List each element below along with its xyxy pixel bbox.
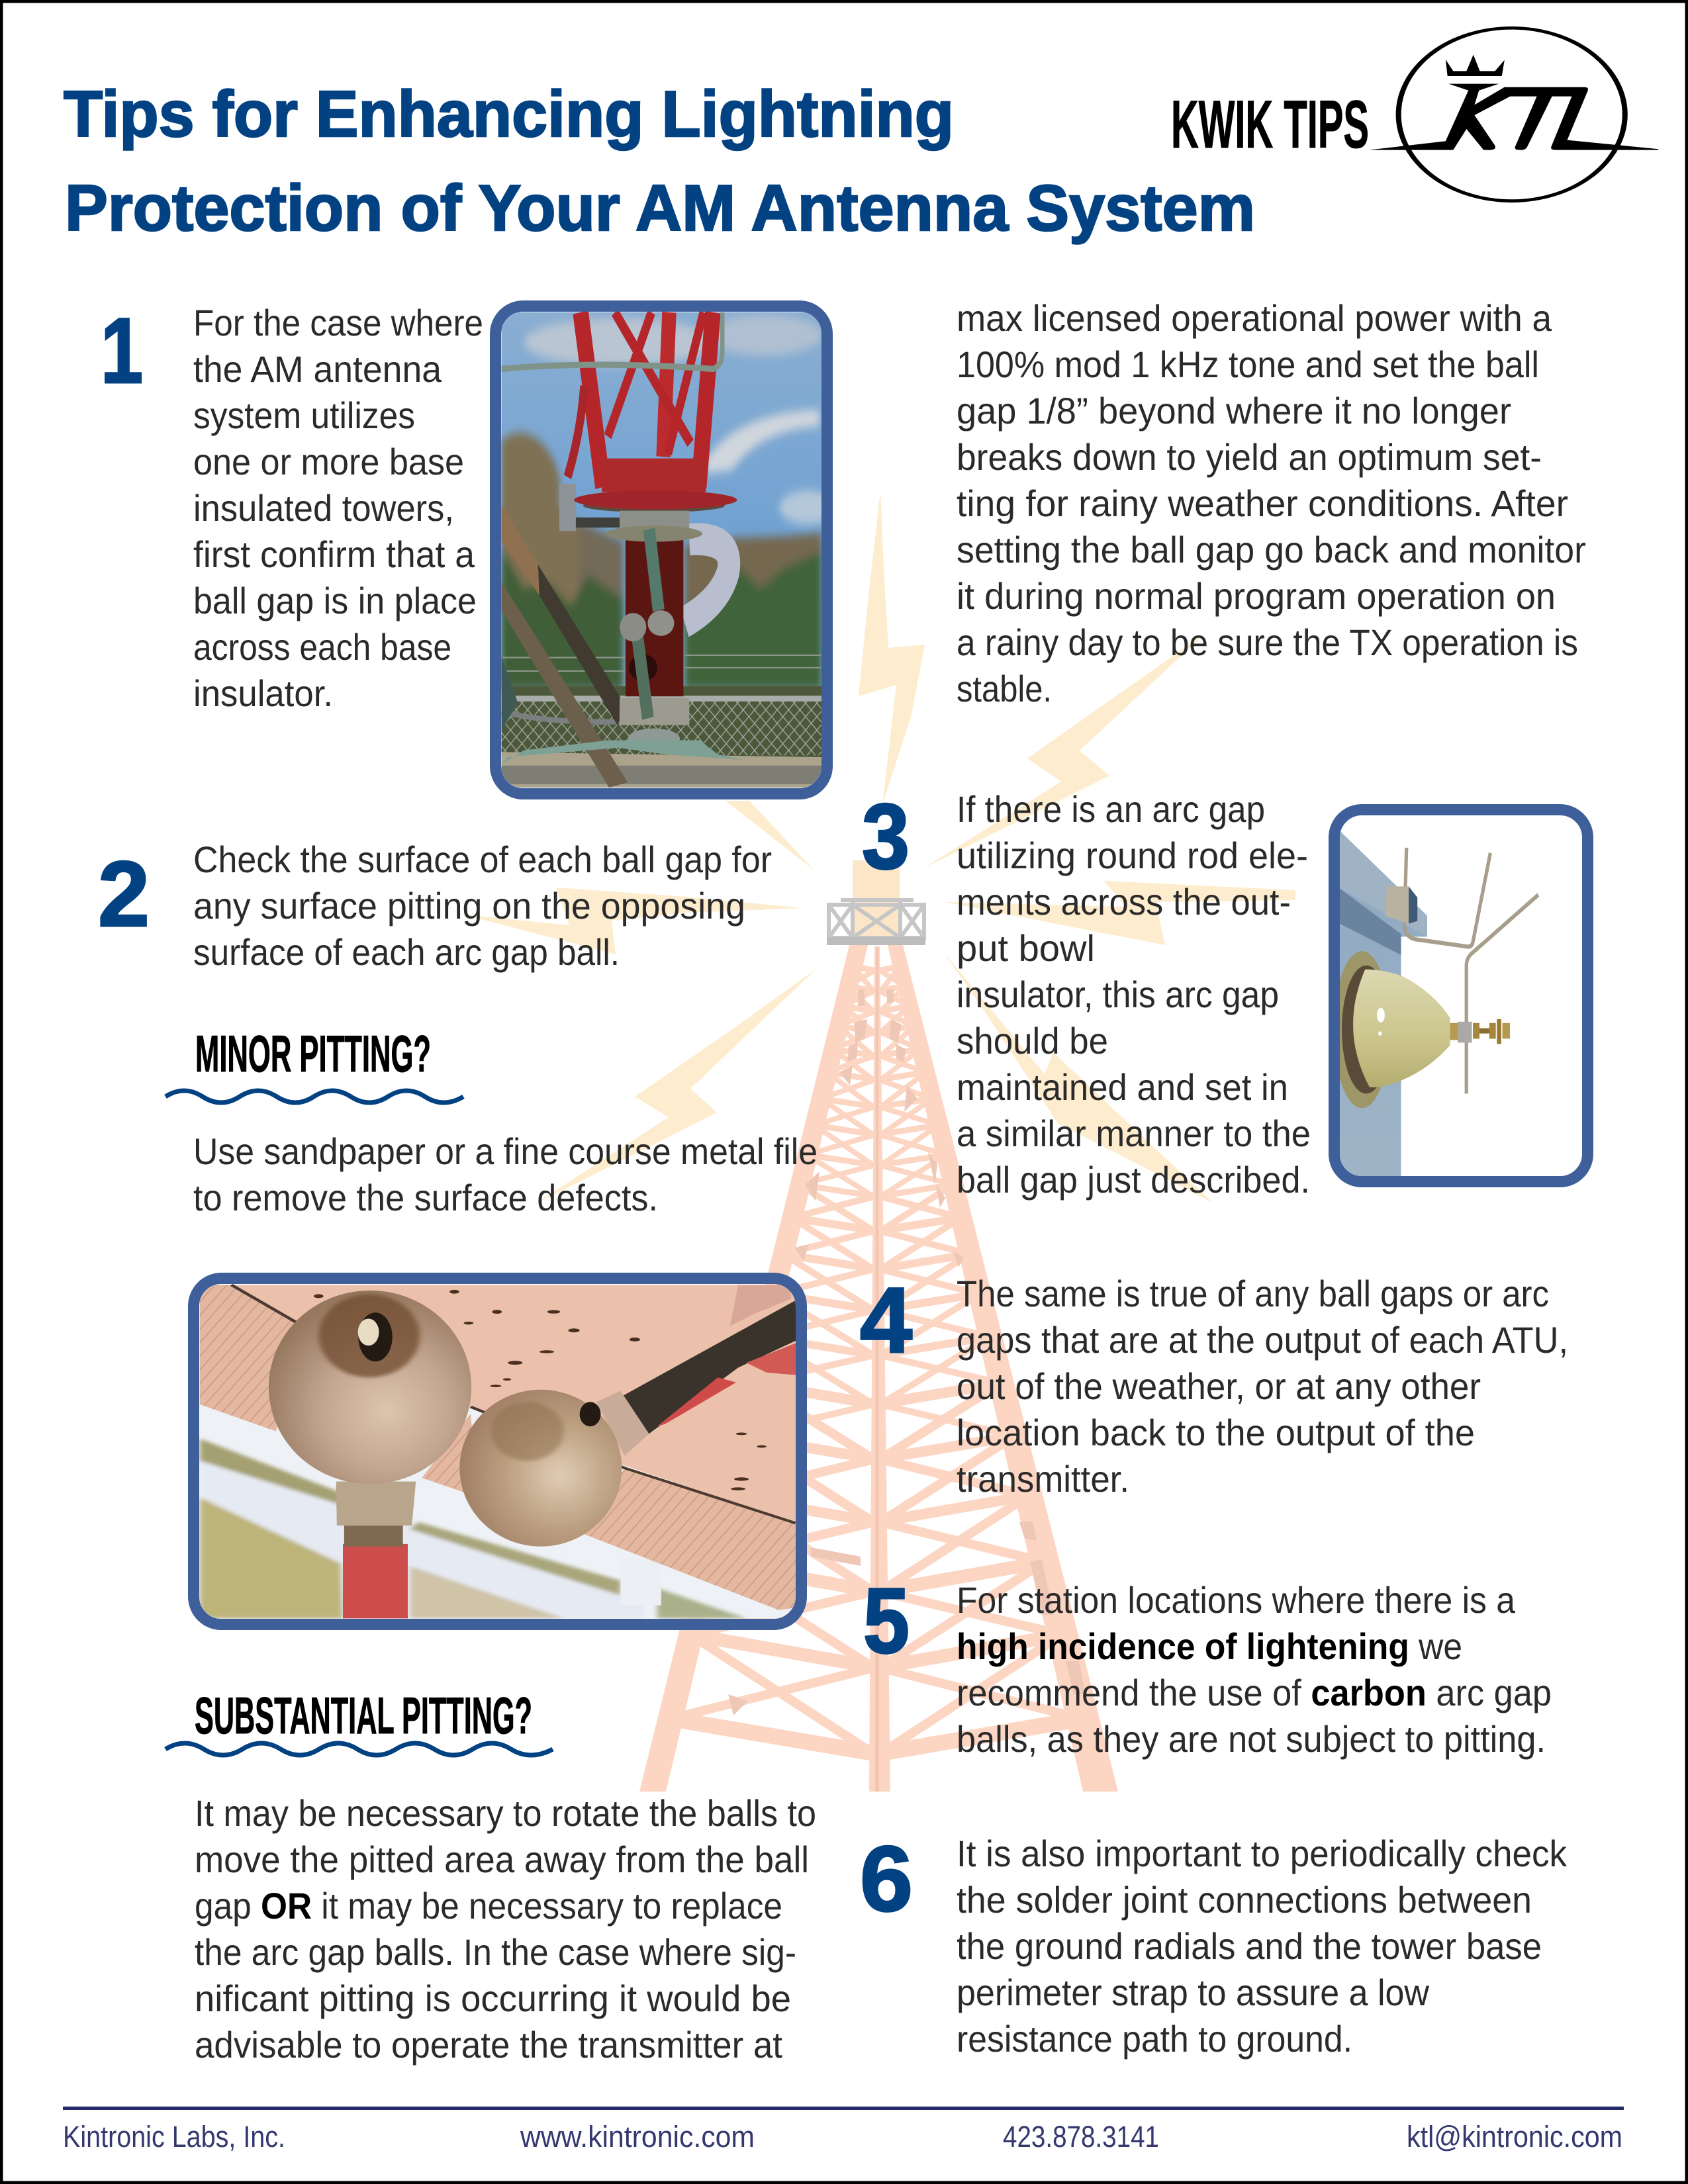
number 6: 6	[860, 1827, 913, 1931]
step 1 text: insulated towers,	[193, 487, 454, 529]
footer contact details: www.kintronic.com	[520, 2120, 755, 2154]
step 4 text: out of the weather, or at any other	[957, 1365, 1481, 1407]
step 6 text: the ground radials and the tower base	[957, 1925, 1542, 1967]
substantial pitting text: It may be necessary to rotate the balls to	[195, 1792, 816, 1834]
step 6 text	[957, 1833, 1568, 2060]
step 3 text: insulator, this arc gap	[957, 974, 1279, 1015]
continued step text, right column: breaks down to yield an optimum set-	[957, 436, 1542, 478]
number 2: 2	[98, 842, 150, 946]
wavy underline: minor pitting	[165, 1091, 463, 1103]
number 5: 5	[863, 1569, 910, 1672]
footer contact details: ktl@kintronic.com	[1407, 2120, 1622, 2154]
step 4 text: location back to the output of the	[957, 1412, 1475, 1453]
tower lattice	[671, 966, 1082, 1754]
step 4 text	[957, 1273, 1568, 1500]
continued step text, right column: gap 1/8” beyond where it no longer	[957, 390, 1511, 432]
step 6 text: It is also important to periodically check	[957, 1833, 1568, 1874]
step 6 text: resistance path to ground.	[957, 2018, 1352, 2060]
title	[64, 77, 1255, 244]
substantial pitting text: advisable to operate the transmitter at	[195, 2024, 782, 2066]
title: Tips for Enhancing Lightning	[64, 77, 954, 150]
title: Protection of Your AM Antenna System	[65, 171, 1255, 244]
step 1 text: ball gap is in place	[193, 580, 477, 621]
wavy underline: substantial pitting	[165, 1743, 553, 1755]
step 5 text: recommend the use of carbon arc gap	[957, 1672, 1552, 1713]
footer contact details	[63, 2120, 1622, 2154]
footer contact details: 423.878.3141	[1003, 2120, 1159, 2154]
continued step text, right column: a rainy day to be sure the TX operation is	[957, 621, 1578, 663]
step 3 text: If there is an arc gap	[957, 788, 1265, 830]
continued step text, right column: setting the ball gap go back and monitor	[957, 529, 1586, 570]
heading: substantial pitting: SUBSTANTIAL PITTING?	[195, 1686, 532, 1745]
step 5 text: balls, as they are not subject to pitting.	[957, 1718, 1546, 1760]
number 3: 3	[862, 784, 910, 888]
step 1 text: first confirm that a	[193, 533, 475, 575]
heading: minor pitting: MINOR PITTING?	[195, 1024, 431, 1083]
step 5 text	[957, 1579, 1552, 1760]
continued step text, right column: stable.	[957, 668, 1052, 709]
continued step text, right column: 100% mod 1 kHz tone and set the ball	[957, 343, 1539, 385]
step 3 text: put bowl	[957, 927, 1095, 969]
footer rule	[63, 2107, 1624, 2110]
continued step text, right column: max licensed operational power with a	[957, 297, 1552, 339]
step 1 text: across each base	[193, 626, 451, 668]
step 3 text: utilizing round rod ele-	[957, 835, 1308, 876]
step 4 text: transmitter.	[957, 1458, 1129, 1500]
step 2 text: surface of each arc gap ball.	[193, 931, 620, 973]
photo frame	[193, 1279, 801, 1624]
step 2 text	[193, 839, 772, 973]
step 3 text: ball gap just described.	[957, 1159, 1310, 1201]
continued step text, right column	[957, 297, 1586, 709]
photo frame	[495, 306, 827, 794]
KWIK TIPS label: KWIK TIPS	[1171, 87, 1369, 162]
tower platform	[827, 900, 925, 941]
step 1 text: one or more base	[193, 441, 464, 482]
step 2 text: Check the surface of each ball gap for	[193, 839, 772, 880]
number 1: 1	[101, 298, 143, 402]
continued step text, right column: it during normal program operation on	[957, 575, 1556, 617]
substantial pitting text: move the pitted area away from the ball	[195, 1839, 809, 1880]
minor pitting text: Use sandpaper or a fine course metal file	[193, 1130, 818, 1172]
step 3 text: ments across the out-	[957, 881, 1291, 923]
substantial pitting text: gap OR it may be necessary to replace	[195, 1885, 782, 1927]
step 5 text: high incidence of lightening we	[957, 1625, 1462, 1667]
icon: KTL logo	[1369, 28, 1658, 201]
minor pitting text: to remove the surface defects.	[193, 1177, 658, 1218]
step 6 text: the solder joint connections between	[957, 1879, 1532, 1921]
step 4 text: gaps that are at the output of each ATU,	[957, 1319, 1568, 1361]
antenna top glow	[853, 860, 900, 942]
substantial pitting text: nificant pitting is occurring it would be	[195, 1978, 791, 2019]
substantial pitting text: the arc gap balls. In the case where sig-	[195, 1931, 796, 1973]
lightning bolts background	[463, 492, 1295, 1205]
step 3 text: a similar manner to the	[957, 1113, 1311, 1154]
photo: pitted arc gap balls	[193, 1279, 801, 1624]
step 5 text: For station locations where there is a	[957, 1579, 1516, 1621]
tower legs	[639, 942, 1118, 1792]
minor pitting text	[193, 1130, 818, 1218]
number 4: 4	[860, 1268, 912, 1372]
step 1 text	[193, 302, 483, 714]
step 3 text	[957, 788, 1311, 1201]
step 2 text: any surface pitting on the opposing	[193, 885, 745, 927]
step 6 text: perimeter strap to assure a low	[957, 1972, 1430, 2013]
step 1 text: insulator.	[193, 672, 333, 714]
continued step text, right column: ting for rainy weather conditions. After	[957, 482, 1568, 524]
photo: arc gap on output bowl insulator	[1334, 810, 1587, 1182]
tower illustration	[639, 860, 1118, 1792]
step 3 text: maintained and set in	[957, 1066, 1288, 1108]
substantial pitting text	[195, 1792, 816, 2066]
step 1 text: the AM antenna	[193, 348, 442, 390]
footer contact details: Kintronic Labs, Inc.	[63, 2120, 285, 2154]
step 1 text: system utilizes	[193, 394, 415, 436]
step 4 text: The same is true of any ball gaps or arc	[957, 1273, 1549, 1314]
step 1 text: For the case where	[193, 302, 483, 343]
tower centre mast	[875, 946, 879, 1792]
photo: ball gap on tower base insulator	[495, 306, 836, 794]
step 3 text: should be	[957, 1020, 1108, 1062]
tower shaded braces	[728, 989, 1086, 1715]
photo frame	[1335, 810, 1587, 1182]
